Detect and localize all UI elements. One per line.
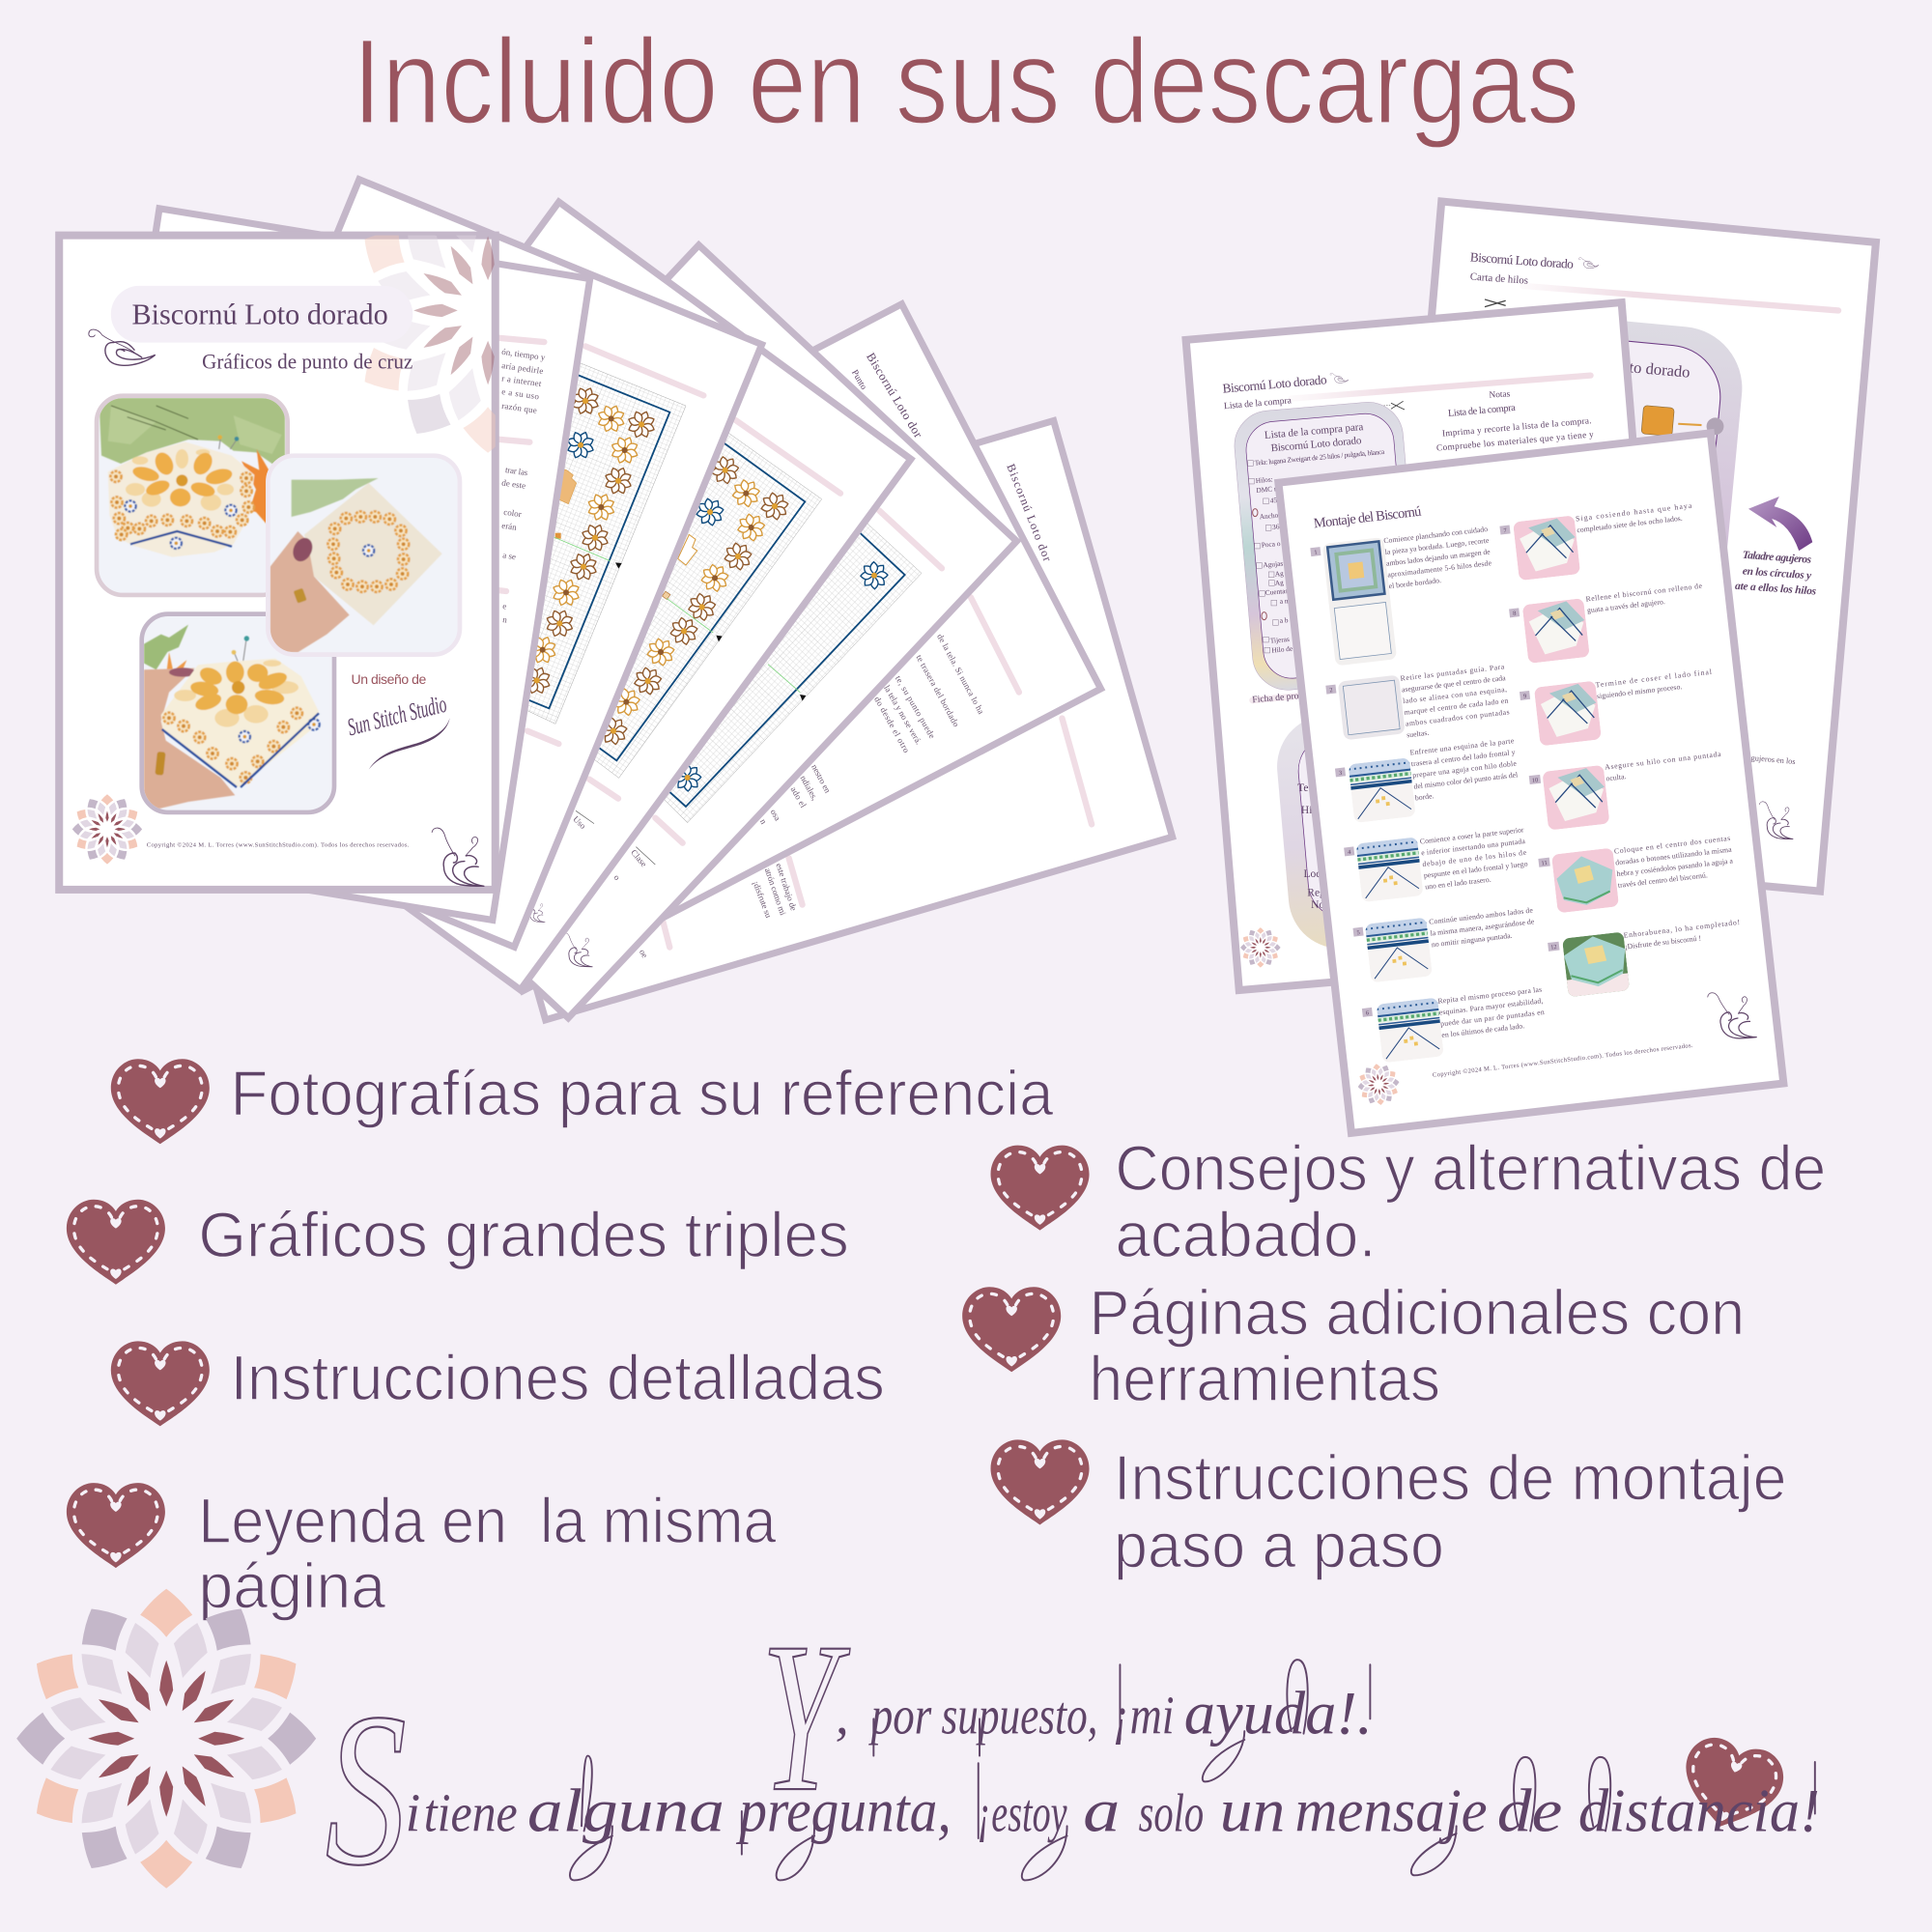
step 9 [1520,668,1718,748]
bullet: tips: acabado. [1115,1200,1377,1271]
large mandala logo [16,1589,316,1889]
fanned page: title and instructions text: la tela y no se verá. [882,684,923,746]
step 7: completado siete de los ocho lados. [1577,514,1683,534]
right page: shopping list, middle: Lista de la compra para [1264,421,1364,441]
step 3: borde. [1414,791,1435,802]
bullet: assembly [991,1439,1786,1581]
step 8: 8 [1513,611,1517,617]
script line one: supuesto, [941,1687,1097,1747]
step 2: ambos cuadrados con puntadas [1405,707,1510,728]
step 12: 12 [1550,944,1557,952]
script line two: tiene [424,1783,518,1843]
right page: shopping list, middle: Ficha de pro [1252,691,1299,705]
script line two: ¡estoy [977,1783,1067,1843]
step 3: Enfrente una esquina de la parte [1409,736,1515,757]
step 4: Comience a coser la parte superior [1419,825,1524,846]
bullet: extra pages: herramientas [1090,1344,1440,1415]
photo: biscornu with blue centre flower [268,456,460,655]
cover title: Biscornú Loto dorado [131,298,388,330]
fanned page: title and instructions text [324,304,1101,991]
right page: shopping list, middle: Loc [1303,868,1321,880]
step 7: Siga cosiendo hasta que haya [1576,501,1692,523]
step 4: uno en el lado trasero. [1425,875,1492,892]
cover subtitle: Gráficos de punto de cruz [202,350,413,373]
script line one: Y [761,1599,851,1836]
right page: shopping list, middle: 45 [1269,496,1278,505]
assembly heading: Montaje del Biscornú [1313,504,1422,531]
bullet: legend: Leyenda en la misma [198,1486,777,1557]
right page: shopping list, middle: No [1311,899,1324,911]
fanned page: text page behind cover: a se [502,550,517,561]
bullet: tips [991,1133,1826,1271]
script line two: de [1497,1776,1562,1844]
script line two: alguna [527,1776,724,1844]
right page: shopping list, middle: Notas [1489,389,1511,401]
script line two: pregunta, [736,1776,952,1844]
right page: shopping list, middle: Hilo de [1271,644,1293,655]
fanned page: back page with text: oe [638,948,650,959]
fanned page: title and instructions text: Biscornú Loto dor [864,351,925,440]
fanned page: back page with text: este trabajo de [774,862,799,912]
fanned page: title and instructions text: osa [769,808,782,822]
step 6: esquinas. Para mayor estabilidad, [1438,996,1544,1017]
step 3: prepare una aguja con hilo doble [1412,759,1518,780]
cover small mandala [72,794,142,865]
cover page [55,232,499,894]
script line one: ¡mi [1113,1687,1175,1747]
step 12: Enhorabuena, lo ha completado! [1623,918,1740,940]
right page: shopping list, middle: Hi [1301,805,1312,816]
step 4: 4 [1348,849,1352,856]
step 6: puede dar un par de puntadas en [1440,1008,1545,1028]
right page: shopping list, middle: Ag [1274,569,1284,579]
fanned page: text page behind cover: r a internet [501,373,543,388]
fanned page: title and instructions text: te trasera del bordado [914,653,961,728]
bullet: charts [67,1200,849,1285]
right page: shopping list, middle: Te [1297,782,1308,794]
step 11: doradas o botones utilizando la misma [1615,845,1733,867]
step 8: Rellene el biscornú con relleno de [1585,582,1703,604]
step 5: la misma manera, asegurándose de [1430,917,1535,938]
step 1: la pieza ya bordada. Luego, recorte [1384,536,1490,556]
right page: shopping list, middle: 36 [1272,522,1280,531]
step 3: del mismo color del punto atrás del [1413,770,1519,791]
fanned page: title and instructions text: ado el [789,785,809,810]
step 10: oculta. [1605,772,1627,782]
right page: shopping list, middle: Lista de la compra [1224,395,1293,412]
step 6 [1361,985,1548,1065]
bullet: charts: Gráficos grandes triples [198,1200,849,1271]
step 5: no omitir ninguna puntada. [1431,931,1513,949]
step 7: 7 [1503,527,1507,534]
photo: gold biscornu pentagon [97,396,288,595]
right page: shopping list, middle: a b [1279,615,1289,625]
assembly page copyright: Copyright ©2024 M. L. Torres (www.SunStitchStudio.com). Todos los derechos reservados. [1433,1042,1693,1079]
fanned page: back page with text: ¡disfrute su [751,879,774,920]
script line one: , [836,1687,849,1747]
right page: shopping list, middle: Tela: lugana Zweigart de 25 hilos / pulgada, blanca [1254,447,1385,468]
handwritten note [1735,550,1817,598]
fanned page: text page behind cover: e [502,601,507,611]
fanned page: text page behind cover: color [503,507,522,519]
script line one [761,1599,1373,1836]
right page: shopping list, middle: Biscornú Loto dorado [1222,372,1327,396]
right page: shopping list, middle: Biscornú Loto dorado [1270,435,1362,454]
bullet: legend: página [198,1551,385,1623]
cover faded mandala [365,236,496,452]
right page: shopping list, middle: a n [1279,596,1289,606]
signature logo: Sun Stitch Studio [345,690,449,741]
bullet: assembly: Instrucciones de montaje [1114,1442,1786,1514]
photo: gold biscornu in hand [142,614,334,812]
fanned page: title and instructions text: nestro en [810,762,833,795]
step 2: 2 [1329,687,1333,694]
fanned page: chart with blue flowers: Clase [629,848,649,868]
step 1: aproximadamente 5-6 hilos desde [1387,558,1492,579]
step 1 [1310,525,1501,668]
script line two: distancia! [1578,1776,1820,1844]
script swash flourishes [570,1660,1815,1880]
script line two: i [406,1783,420,1843]
step 11: hebra y cosiéndolos pasando la aguja a [1616,856,1734,878]
fanned page: text page behind cover: ón, tiempo y [501,347,547,362]
designer credit: Un diseño de [352,671,427,687]
step 7 [1499,501,1698,582]
signature logo [345,690,450,770]
cover ornament [89,329,156,365]
right page: shopping list, middle [1186,302,1675,990]
step 8 [1508,582,1709,666]
fanned page: text page behind cover: e a su uso [501,386,540,402]
script line two: un [1220,1776,1285,1844]
step 2: marque el centro de cada lado en [1404,696,1509,717]
assembly page ornament [1707,988,1756,1042]
bullet: instructions [111,1341,885,1426]
step 10: Asegure su hilo con una puntada [1605,750,1721,772]
right page: shopping list, middle: Ag [1274,578,1284,587]
step 12 [1548,918,1746,999]
script line two: mensaje [1295,1776,1488,1844]
step 5: 5 [1356,929,1360,936]
closing script message [326,1599,1820,1912]
step 3 [1334,736,1521,825]
script line two: a [1083,1776,1120,1844]
step 9: Termine de coser el lado final [1595,668,1712,690]
right page: shopping list, middle: Compruebe los materiales que ya tiene y [1436,430,1595,454]
script line two: solo [1139,1783,1204,1843]
bullet: legend [67,1483,777,1623]
right page: shopping list, middle: Hilos: [1255,474,1273,485]
fanned page: title and instructions text: Punto [849,369,868,392]
fanned page: text page behind cover: trar las [504,465,528,477]
chart grid [631,514,922,823]
step 10 [1528,750,1727,832]
chart grid [406,345,686,724]
title: Incluido en sus descargas [353,15,1579,150]
fanned page: chart with blue flowers: o [611,872,622,882]
right page: shopping list, middle: Imprima y recorte la lista de la compra. [1442,416,1592,440]
fanned page: chart with gold flowers, front [112,180,762,947]
bullet: photographs: Fotografías para su referencia [231,1058,1054,1129]
right page: shopping list, middle: Anchor [1259,510,1282,521]
step 1: ambos lados dejando un margen de [1386,547,1492,568]
step 3: trasera al centro del lado frontal y [1410,748,1516,768]
right page: shopping list, middle: Reg [1307,887,1325,898]
fanned page: back page with text: atrón como mi [763,867,788,917]
cover corner ornament [432,828,484,886]
right page: shopping list, middle: Poca o [1261,539,1281,550]
step 12: ¡Disfrute de su biscornú ! [1625,933,1701,951]
right page: shopping list, middle: Cuentas [1264,586,1289,597]
fanned page: title and instructions text: n [758,817,769,826]
step 2: sueltas. [1406,728,1430,739]
fanned page: chart with blue flowers [250,245,1016,1018]
bullet: assembly: paso a paso [1114,1510,1444,1581]
fanned page: back page with text: Biscornú Loto dor [1004,462,1054,563]
step 2 [1325,662,1512,748]
right page: thread chart, back: gujeros en los [1750,753,1796,766]
right page: shopping list, middle: Lista de la compra [1448,403,1517,419]
step 11: Coloque en el centro dos cuentas [1613,834,1731,856]
right page: shopping list, middle: Agujas: [1263,558,1286,569]
fanned page: text page behind cover: razón que [501,401,537,415]
step 11: través del centro del biscornú. [1617,870,1708,890]
right page: thread chart, back: to dorado [1629,357,1690,382]
bullet: extra pages [962,1277,1745,1415]
cover title pill [111,286,412,343]
step 6: Repita el mismo proceso para las [1437,985,1542,1006]
fanned page: back page with text [427,421,1173,1020]
bullet: extra pages: Páginas adicionales con [1090,1277,1745,1349]
script line one: por [868,1687,931,1747]
curved arrow [1748,497,1812,551]
step 2: asegurarse de que el centro de cada [1401,673,1507,694]
right page: thread chart, back: Biscornú Loto dorado [1469,249,1575,271]
right page: assembly instructions, front [1278,433,1783,1133]
step 8: guata a través del agujero. [1586,597,1665,614]
script line one: ayuda!. [1184,1679,1373,1747]
step 1: el borde bordado. [1388,576,1441,590]
bullet: tips: Consejos y alternativas de [1115,1133,1826,1205]
fanned page: chart with gold flowers, middle: Uso [571,814,588,831]
step 4 [1344,825,1530,904]
handwritten note: Taladre agujeros [1742,550,1812,566]
step 1: Comience planchando con cuidado [1383,525,1489,545]
step 1: 1 [1314,549,1318,556]
step 9: 9 [1523,693,1527,700]
fanned page: text page behind cover: de este [501,477,526,491]
handwritten note: en los círculos y [1742,565,1812,582]
fanned page: title and instructions text: ndiales, [798,774,820,802]
step 2: Retire las puntadas guía. Para [1400,662,1505,683]
fanned page: text page behind cover: erán [501,521,518,532]
fanned page: text page behind cover [62,209,590,920]
fanned page: title and instructions text: do desde el otro [872,695,912,754]
script line two: S [326,1669,407,1912]
step 2: lado se alinea con una esquina, [1403,685,1507,705]
cover copyright: Copyright ©2024 M. L. Torres (www.SunStitchStudio.com). Todos los derechos reservados. [147,841,410,848]
assembly page small mandala [1355,1062,1402,1107]
fanned page: chart with gold flowers, middle [168,202,911,990]
right page: shopping list, middle: Tijeras [1269,635,1290,645]
script line two [326,1669,1820,1912]
chart grid [534,418,822,778]
step 4: e inferior insertando una puntada [1421,837,1526,857]
fanned page: text page behind cover: aría pedirle [501,360,544,376]
step 11 [1538,834,1737,915]
fanned page: title and instructions text: de la tela. Si nunca lo ha [935,632,986,716]
step 4: debajo de uno de los hilos de [1422,848,1527,868]
icon: tilted heart [1672,1732,1790,1839]
step 4: pespunte en el lado frontal y luego [1423,859,1528,880]
step 6: 6 [1366,1009,1369,1017]
step 9: siguiendo el mismo proceso. [1596,682,1683,700]
step 6: en los últimos de cada lado. [1441,1021,1525,1039]
step 5 [1352,905,1540,984]
bullet: instructions: Instrucciones detalladas [231,1343,885,1414]
step 10: 10 [1532,777,1539,784]
right page: thread chart, back [1385,201,1876,892]
step 11: 11 [1541,860,1548,867]
fanned page: text page behind cover: n [502,614,508,625]
right page: shopping list, middle: DMC n [1256,484,1278,495]
step 3: 3 [1339,770,1343,777]
step 5: Continúe uniendo ambos lados de [1429,906,1534,926]
right page: thread chart, back: Carta de hilos [1469,271,1528,287]
fanned page: title and instructions text: te, su punto puede [894,674,937,740]
handwritten note: ate a ellos los hilos [1735,581,1817,598]
